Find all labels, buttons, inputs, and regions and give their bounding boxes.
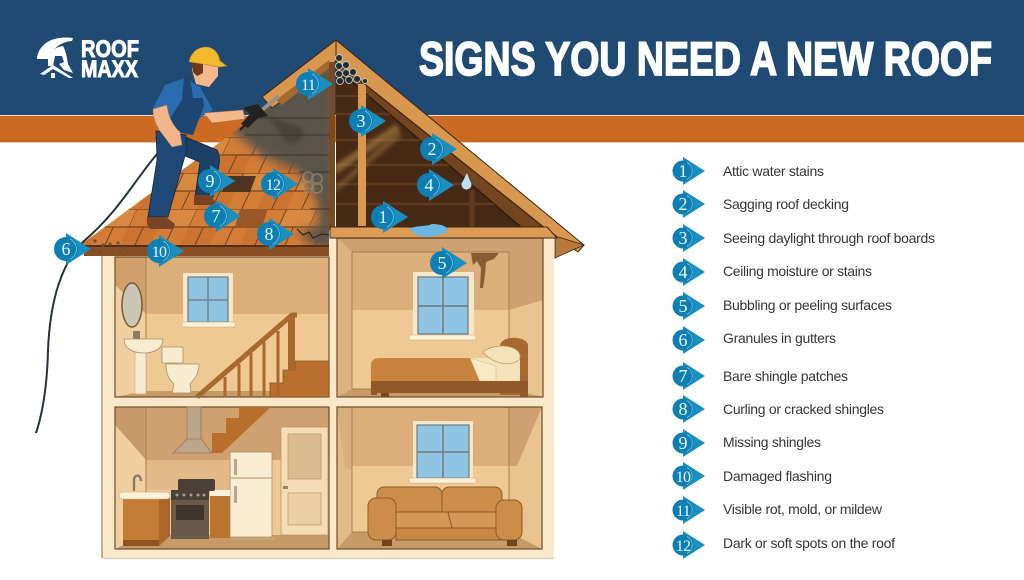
worker figure <box>147 47 303 229</box>
diagram marker 6: 6 <box>62 239 70 259</box>
legend item 9 <box>672 429 821 457</box>
eave right <box>555 236 584 258</box>
range hood <box>173 407 212 453</box>
diagram marker 10 <box>147 235 184 267</box>
legend item 9: 9 <box>678 433 688 453</box>
far arm <box>204 110 245 123</box>
diagram marker 12: 12 <box>266 177 281 194</box>
diagram marker 10: 10 <box>152 244 167 261</box>
diagram marker 4 <box>417 169 454 201</box>
legend item 11: 11 <box>676 503 691 520</box>
mirror <box>122 283 142 327</box>
diagram marker 3: 3 <box>356 111 366 131</box>
legend item 10: 10 <box>676 469 691 486</box>
legend item 1 <box>672 157 824 185</box>
stairs <box>197 315 329 397</box>
legend item 1: Attic water stains <box>723 163 824 179</box>
toilet <box>162 347 199 393</box>
room: upper right bedroom <box>337 238 543 397</box>
legend item 8 <box>672 395 884 423</box>
rotted mold patch <box>336 54 368 84</box>
legend item 10: Damaged flashing <box>723 468 832 484</box>
diagram marker 5: 5 <box>438 253 446 273</box>
hard hat <box>189 47 227 67</box>
window <box>409 272 476 340</box>
near arm <box>153 105 182 147</box>
logo wordmark: ROOF <box>81 36 139 63</box>
under-stair steps <box>212 407 271 453</box>
head <box>192 62 218 87</box>
overalls bib <box>169 77 204 135</box>
water puddle <box>410 224 448 237</box>
legend item 8: 8 <box>678 399 688 419</box>
diagram marker 9 <box>198 165 235 197</box>
legend item 11 <box>672 496 883 524</box>
room: lower left kitchen <box>115 407 329 549</box>
diagram marker 7: 7 <box>212 206 220 226</box>
legend item 3: 3 <box>678 228 688 248</box>
legend item 2 <box>672 190 849 218</box>
legend item 3: Seeing daylight through roof boards <box>723 230 935 246</box>
diagram marker 7 <box>204 200 241 232</box>
ceiling stain <box>471 253 499 288</box>
diagram marker 11: 11 <box>301 77 316 94</box>
soft spots <box>303 172 322 193</box>
legend item 4: Ceiling moisture or stains <box>723 263 872 279</box>
legend item 7: 7 <box>678 366 688 386</box>
header band <box>0 0 1024 143</box>
attic interior <box>335 61 545 228</box>
room: lower right living room <box>337 407 542 549</box>
door <box>281 427 328 535</box>
legend item 7: Bare shingle patches <box>723 368 848 384</box>
weathered grey section <box>229 68 329 245</box>
front leg <box>148 131 186 217</box>
bare patch <box>235 209 268 227</box>
legend item 12: 12 <box>676 538 691 555</box>
legend item 8: Curling or cracked shingles <box>723 401 884 417</box>
legend item 6: 6 <box>678 330 688 350</box>
gutter fascia <box>83 239 329 256</box>
diagram marker 1: 1 <box>378 207 388 227</box>
diagram marker 9: 9 <box>206 171 214 191</box>
diagram marker 12 <box>261 168 298 200</box>
fridge <box>230 452 274 540</box>
legend item 9: Missing shingles <box>723 434 821 450</box>
boot <box>194 195 216 205</box>
legend item 3 <box>672 224 935 252</box>
diagram marker 8 <box>257 218 294 250</box>
legend item 6 <box>672 326 836 354</box>
missing shingles <box>222 176 256 192</box>
spray mist <box>268 116 303 144</box>
legend item 5: Bubbling or peeling surfaces <box>723 297 892 313</box>
cracks <box>297 229 329 238</box>
stove <box>171 479 215 539</box>
granules <box>91 239 126 254</box>
legend item 4: 4 <box>678 262 688 282</box>
window <box>409 421 476 483</box>
room: upper left bathroom and stairs <box>115 257 329 397</box>
diagram marker 11 <box>296 68 333 100</box>
sofa <box>368 487 522 546</box>
cabinets <box>119 476 230 546</box>
legend item 6: Granules in gutters <box>723 330 836 346</box>
legend item 11: Visible rot, mold, or mildew <box>723 501 883 517</box>
diagram marker 2 <box>420 133 457 165</box>
diagram marker 1 <box>371 201 408 233</box>
diagram marker 4: 4 <box>424 175 434 195</box>
sink <box>124 331 163 394</box>
daylight rays <box>335 124 402 192</box>
legend item 10 <box>672 462 832 490</box>
left roof shingles <box>83 60 335 250</box>
icon: spartan helmet <box>37 38 73 78</box>
legend item 2: Sagging roof decking <box>723 196 849 212</box>
logo: Roof Maxx <box>37 36 139 83</box>
diagram marker 5 <box>430 247 467 279</box>
legend item 12 <box>672 531 895 559</box>
back leg <box>180 136 220 197</box>
legend item 4 <box>672 258 872 286</box>
diagram marker 6 <box>54 233 91 265</box>
diagram marker 8: 8 <box>264 224 274 244</box>
boot <box>147 217 175 229</box>
roof frame and rafters <box>262 40 584 258</box>
house walls <box>102 238 554 558</box>
legend item 2: 2 <box>678 194 688 214</box>
legend item 5 <box>672 292 892 320</box>
diagram marker 3 <box>349 105 386 137</box>
diagram marker 2: 2 <box>428 139 436 159</box>
legend item 5: 5 <box>678 296 688 316</box>
window <box>182 273 235 327</box>
ceiling plank <box>330 227 557 238</box>
torso shirt <box>153 78 213 135</box>
bed <box>371 338 528 397</box>
water drop <box>462 173 472 190</box>
spray gun and wand <box>240 96 279 130</box>
logo: Roof Maxx: MAXX <box>81 56 138 83</box>
hose <box>36 154 157 433</box>
legend item 1: 1 <box>678 161 688 181</box>
legend item 7 <box>672 362 848 390</box>
legend item 12: Dark or soft spots on the roof <box>723 535 895 551</box>
legend <box>672 157 935 559</box>
